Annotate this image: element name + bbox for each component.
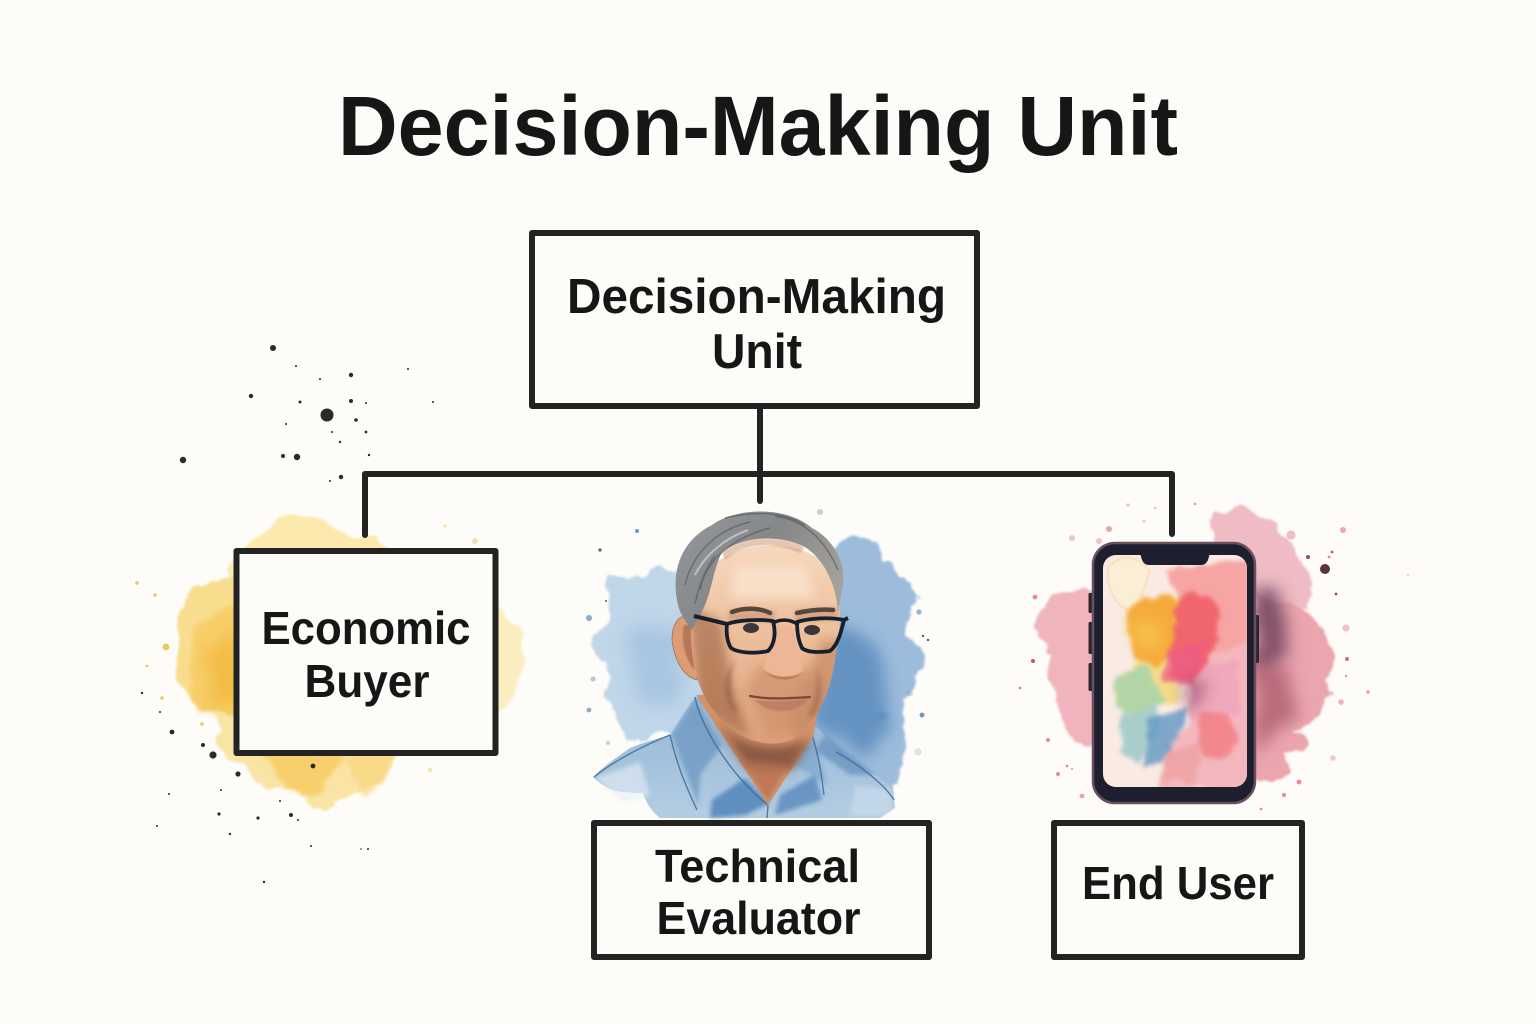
blue speckles <box>586 509 929 756</box>
portrait: technical evaluator <box>593 512 895 818</box>
face <box>691 546 840 744</box>
forehead hairline <box>722 539 805 560</box>
watercolor: blue wash behind Technical Evaluator <box>595 540 924 790</box>
watercolor: pink wash behind End User <box>1037 508 1333 783</box>
box: Decision-Making Unit: Unit <box>712 325 802 379</box>
black ink speckles <box>141 345 434 883</box>
phone notch <box>1140 553 1210 565</box>
ear <box>672 615 697 680</box>
phone body <box>1093 543 1255 803</box>
box: End User: End User <box>1082 857 1274 909</box>
box: Economic Buyer: Buyer <box>304 655 430 707</box>
box: Technical Evaluator: Evaluator <box>656 892 861 944</box>
hair highlight <box>695 530 748 575</box>
title: Decision-Making Unit <box>338 79 1178 173</box>
phone screen <box>1103 555 1247 787</box>
side buttons <box>1088 593 1259 691</box>
neck <box>696 690 822 805</box>
screen watercolor <box>1108 558 1255 790</box>
box: Decision-Making Unit <box>532 233 977 406</box>
collar lines <box>594 697 894 818</box>
box: Technical Evaluator: Technical <box>655 840 860 892</box>
box: Economic Buyer: Economic <box>262 602 470 654</box>
watercolor: yellow wash behind Economic Buyer <box>179 519 525 801</box>
shirt <box>593 697 895 818</box>
eyebrows <box>732 609 770 613</box>
hair <box>676 512 843 630</box>
mouth <box>750 696 810 698</box>
box: Economic Buyer <box>236 551 496 753</box>
pink speckles <box>1019 503 1409 810</box>
connector lines <box>365 407 1172 535</box>
box: Technical Evaluator <box>594 823 929 957</box>
hair strands <box>685 514 838 604</box>
face shading <box>688 565 845 745</box>
yellow speckles <box>135 524 478 772</box>
glasses <box>694 616 848 653</box>
eyes <box>743 623 759 633</box>
box: End User <box>1054 823 1302 957</box>
box: Decision-Making Unit: Decision-Making <box>567 270 946 324</box>
nose <box>763 625 803 677</box>
shirt shading <box>595 700 892 818</box>
icon: smartphone <box>1088 543 1259 803</box>
